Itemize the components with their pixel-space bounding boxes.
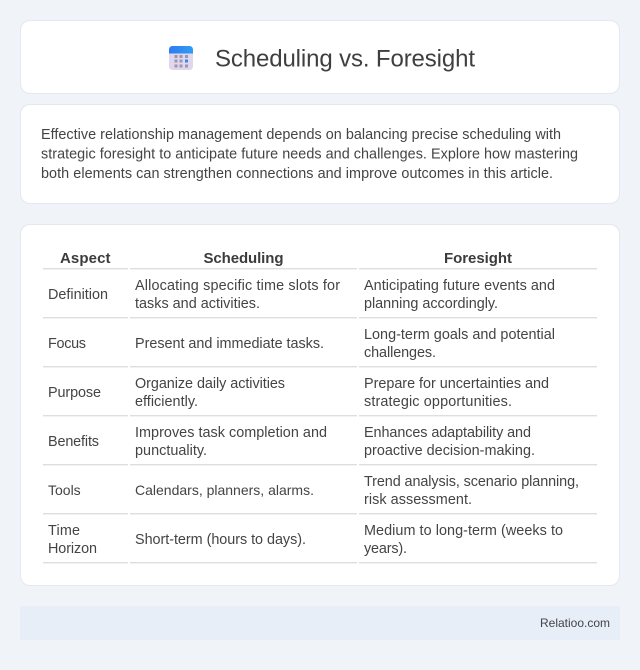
text block: introduction: both elements can strengthen connections and improve outcomes in this article. [41,166,553,182]
Purpose: Foresight: strategic opportunities. [364,394,512,410]
Focus: Foresight: Long-term goals and potential [364,327,555,343]
Definition label: Definition [48,287,108,303]
Tools: Foresight: Trend analysis, scenario planning, [364,474,579,490]
Focus: Scheduling: Present and immediate tasks. [135,336,324,352]
row: Tools [48,474,579,508]
Time Horizon label: Horizon [48,541,97,557]
Focus label: Focus [48,336,86,352]
Definition: Scheduling [135,278,340,312]
Benefits label: Benefits [48,434,99,450]
text block: introduction: Effective relationship management depends on balancing precise scheduling with [41,127,561,143]
Definition: Foresight: planning accordingly. [364,296,498,312]
heading: Scheduling: Scheduling [204,250,284,267]
Tools: Foresight [364,474,579,508]
footer bar [20,606,620,640]
panel: comparison table [20,224,620,586]
Purpose label: Purpose [48,385,101,401]
Benefits: Scheduling: punctuality. [135,443,207,459]
Time Horizon label: Time [48,523,80,539]
Tools: Foresight: risk assessment. [364,492,472,508]
row: Time Horizon [48,523,563,557]
Benefits: Scheduling [135,425,327,459]
Focus: Foresight [364,327,555,361]
Focus: Foresight: challenges. [364,345,436,361]
Purpose: Scheduling: efficiently. [135,394,198,410]
text block: introduction: strategic foresight to anticipate future needs and challenges. Explore how mastering [41,146,578,162]
Definition: Scheduling: Allocating specific time slots for [135,278,340,294]
heading: Foresight: Foresight [444,250,512,267]
Definition: Scheduling: tasks and activities. [135,296,260,312]
Definition: Foresight [364,278,555,312]
Purpose: Foresight [364,376,549,410]
heading: Aspect: Aspect [60,250,110,267]
Benefits: Foresight: proactive decision-making. [364,443,535,459]
Time Horizon: Scheduling: Short-term (hours to days). [135,532,306,548]
Purpose: Scheduling: Organize daily activities [135,376,285,392]
Benefits: Foresight [364,425,535,459]
footer source text: Relatioo.com [540,616,610,630]
Tools: Scheduling: Calendars, planners, alarms. [135,482,314,498]
Benefits: Foresight: Enhances adaptability and [364,425,531,441]
row: Definition [48,278,555,312]
Time Horizon: Foresight [364,523,563,557]
row: Focus [48,327,555,361]
Definition: Foresight: Anticipating future events and [364,278,555,294]
Purpose: Foresight: Prepare for uncertainties and [364,376,549,392]
row: Benefits [48,425,535,459]
Purpose: Scheduling [135,376,285,410]
row: Purpose [48,376,549,410]
Time Horizon: Foresight: Medium to long-term (weeks to [364,523,563,539]
panel: title header [20,20,620,94]
Time Horizon label [48,523,97,557]
Benefits: Scheduling: Improves task completion and [135,425,327,441]
icon: calendar [169,46,193,70]
table header row [60,250,512,267]
text block: introduction [41,127,578,182]
Tools label: Tools [48,482,81,498]
title: Scheduling vs. Foresight [215,46,475,72]
Time Horizon: Foresight: years). [364,541,407,557]
panel: introduction [20,104,620,204]
